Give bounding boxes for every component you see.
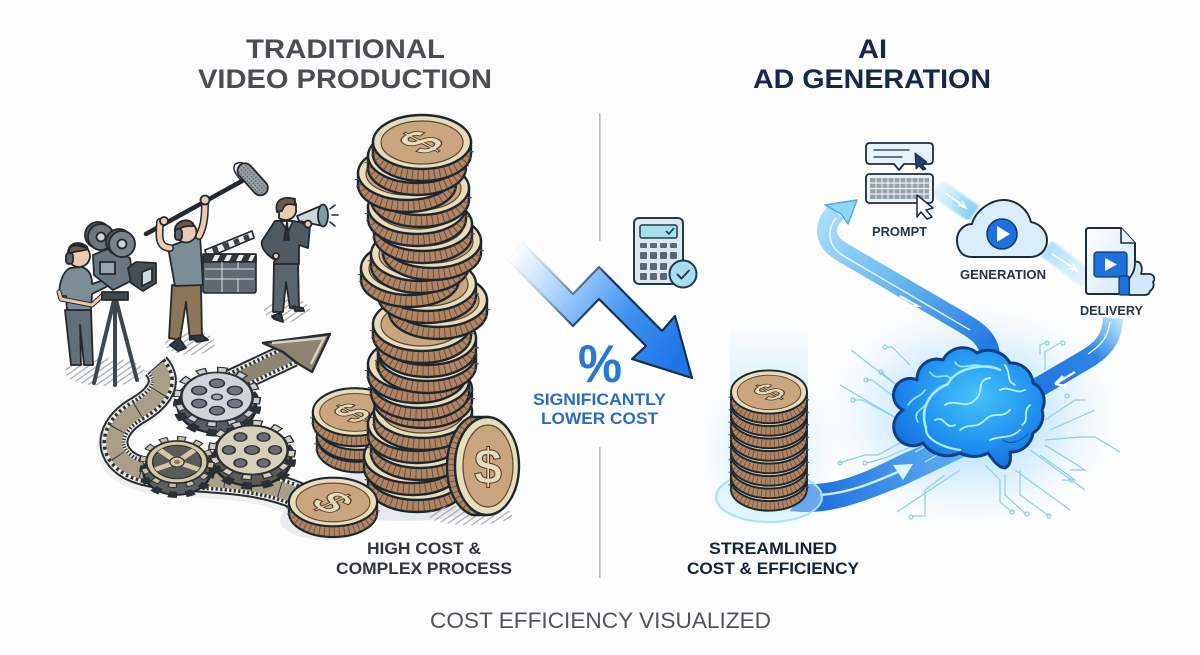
small coin stack: AI bbox=[716, 370, 822, 522]
dollar sign: $ bbox=[743, 378, 796, 406]
dollar sign: $ bbox=[387, 123, 457, 161]
dollar sign: $ bbox=[322, 396, 382, 429]
right heading: AI ad generation bbox=[753, 34, 991, 94]
divider: upper bbox=[599, 113, 601, 241]
savings label: SIGNIFICANTLY bbox=[533, 391, 666, 409]
savings label bbox=[533, 391, 666, 428]
brain bbox=[893, 348, 1044, 468]
left caption: COMPLEX PROCESS bbox=[336, 560, 512, 578]
right caption: COST & EFFICIENCY bbox=[687, 560, 859, 578]
prompt icon bbox=[866, 143, 933, 219]
flow band: generation to delivery bbox=[1046, 248, 1088, 280]
standing coin: $ bbox=[474, 439, 502, 495]
dollar sign: $ bbox=[299, 486, 365, 520]
generation label: GENERATION bbox=[960, 268, 1046, 282]
flat coin in front bbox=[280, 478, 377, 540]
right heading: AI ad generation: AI bbox=[858, 34, 887, 64]
right heading: AI ad generation: AD GENERATION bbox=[753, 64, 991, 94]
right caption bbox=[687, 540, 859, 578]
flow band: delivery down to brain bbox=[1020, 318, 1113, 398]
zigzag cost-drop arrow bbox=[508, 243, 692, 378]
footer caption: COST EFFICIENCY VISUALIZED bbox=[430, 608, 771, 633]
crew: boom operator bbox=[146, 160, 271, 355]
left caption: HIGH COST & bbox=[367, 540, 481, 558]
film strip road with arrow bbox=[111, 334, 330, 502]
calculator icon bbox=[634, 218, 696, 288]
left caption bbox=[336, 540, 512, 578]
circuit traces around brain bbox=[838, 341, 1120, 519]
flow band: prompt to generation bbox=[936, 187, 974, 214]
flow band: brain back up to prompt bbox=[825, 200, 990, 358]
clapperboard bbox=[203, 231, 256, 293]
standing coin bbox=[428, 417, 519, 525]
flow band: coins into brain bbox=[790, 432, 966, 512]
crew: director with megaphone bbox=[262, 198, 338, 322]
delivery label: DELIVERY bbox=[1080, 304, 1144, 318]
right caption: STREAMLINED bbox=[709, 540, 837, 558]
prompt label: PROMPT bbox=[872, 225, 927, 239]
tall coin stack bbox=[358, 115, 487, 512]
gear: silver bbox=[178, 370, 256, 433]
small coin stack bbox=[313, 388, 399, 472]
percent symbol: % bbox=[578, 335, 622, 394]
left heading: traditional video production: VIDEO PRODUCTION bbox=[198, 64, 492, 94]
delivery document icon bbox=[1086, 228, 1154, 295]
generation cloud icon bbox=[957, 200, 1047, 257]
ground shadow under coins bbox=[310, 469, 500, 521]
left heading: traditional video production: TRADITIONAL bbox=[246, 34, 445, 64]
crew: camera operator with camera on tripod bbox=[59, 222, 156, 386]
right-side glows bbox=[684, 290, 1137, 550]
left heading: traditional video production bbox=[198, 34, 492, 94]
gears bbox=[144, 370, 291, 495]
divider: lower bbox=[599, 447, 601, 578]
savings label: LOWER COST bbox=[541, 410, 658, 428]
gear: cream bbox=[213, 423, 291, 486]
gear: tan wheel bbox=[144, 439, 210, 495]
